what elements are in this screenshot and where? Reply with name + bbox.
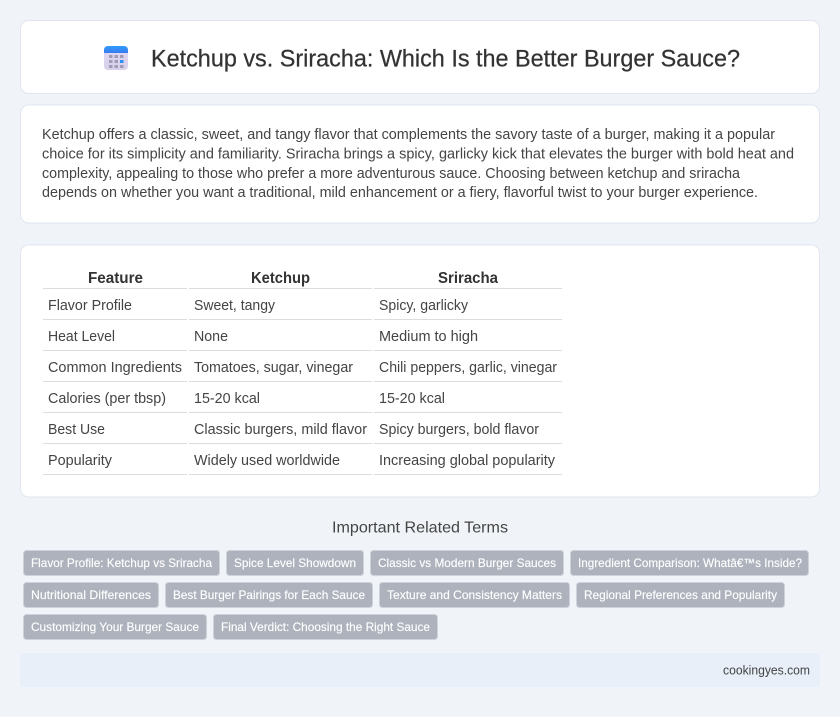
- tag: Flavor Profile: Ketchup vs Sriracha: [31, 556, 212, 570]
- tag: Best Burger Pairings for Each Sauce: [173, 588, 365, 602]
- row: heat level: [43, 329, 562, 350]
- row: flavor profile: Flavor Profile: [48, 298, 132, 314]
- table header row: Feature: [88, 270, 143, 287]
- intro paragraph: complexity, appealing to those who prefer a more adventurous sauce. Choosing between ketchup and sriracha: [42, 166, 740, 182]
- title: Ketchup vs. Sriracha: Which Is the Better Burger Sauce?: [151, 46, 740, 72]
- panel: introduction: [20, 105, 820, 223]
- tag: [570, 550, 808, 576]
- panel: comparison table: [20, 245, 820, 497]
- tag list: related terms: [24, 550, 808, 640]
- row: flavor profile: Sweet, tangy: [194, 298, 276, 314]
- tag: Regional Preferences and Popularity: [584, 588, 777, 602]
- tag: [370, 550, 564, 576]
- row: popularity: Widely used worldwide: [194, 453, 340, 469]
- row: calories: 15-20 kcal: [194, 391, 260, 407]
- footer: [20, 653, 820, 687]
- tag: [380, 582, 570, 608]
- footer source text: cookingyes.com: [723, 664, 810, 678]
- intro paragraph: [42, 127, 794, 201]
- row: common ingredients: Tomatoes, sugar, vinegar: [194, 360, 353, 376]
- row: popularity: Increasing global popularity: [379, 453, 556, 469]
- tag: [24, 550, 220, 576]
- row: common ingredients: [43, 360, 562, 382]
- tag: [24, 582, 158, 608]
- tag: [226, 550, 364, 576]
- row: flavor profile: Spicy, garlicky: [379, 298, 469, 314]
- table header row: Ketchup: [251, 270, 310, 287]
- tag: Ingredient Comparison: Whatâ€™s Inside?: [578, 556, 802, 570]
- row: common ingredients: Chili peppers, garlic, vinegar: [379, 360, 557, 376]
- intro paragraph: Ketchup offers a classic, sweet, and tangy flavor that complements the savory taste of a burger, making it a popular: [42, 127, 775, 143]
- row: popularity: Popularity: [48, 453, 113, 469]
- row: popularity: [43, 453, 562, 474]
- tag: Final Verdict: Choosing the Right Sauce: [221, 620, 430, 634]
- tag: [24, 614, 206, 640]
- row: heat level: Medium to high: [379, 329, 478, 345]
- tag: [214, 614, 438, 640]
- intro paragraph: depends on whether you want a traditional, mild enhancement or a fiery, flavorful twist to your burger experience.: [42, 185, 758, 201]
- tag: Customizing Your Burger Sauce: [31, 620, 199, 634]
- table header row: Sriracha: [438, 270, 498, 287]
- tag: Classic vs Modern Burger Sauces: [378, 556, 556, 570]
- row: common ingredients: Common Ingredients: [48, 360, 182, 376]
- table header row: [43, 270, 562, 288]
- row: calories: [43, 391, 562, 412]
- heading: important related terms: Important Related Terms: [332, 520, 508, 536]
- row: heat level: None: [194, 329, 228, 345]
- icon: calendar: [104, 46, 128, 70]
- intro paragraph: choice for its simplicity and familiarity. Sriracha brings a spicy, garlicky kick that elevates the burger with bold heat and: [42, 146, 794, 162]
- tag: [166, 582, 372, 608]
- row: best use: Spicy burgers, bold flavor: [379, 422, 539, 438]
- tag: [576, 582, 784, 608]
- row: best use: Best Use: [48, 422, 105, 438]
- tag: Texture and Consistency Matters: [387, 588, 562, 602]
- row: calories: 15-20 kcal: [379, 391, 445, 407]
- row: best use: Classic burgers, mild flavor: [194, 422, 367, 438]
- tag: Spice Level Showdown: [234, 556, 356, 570]
- panel: title header: [20, 20, 820, 94]
- row: best use: [43, 422, 562, 444]
- row: flavor profile: [43, 298, 562, 320]
- row: calories: Calories (per tbsp): [48, 391, 166, 407]
- row: heat level: Heat Level: [48, 329, 115, 345]
- tag: Nutritional Differences: [31, 588, 151, 602]
